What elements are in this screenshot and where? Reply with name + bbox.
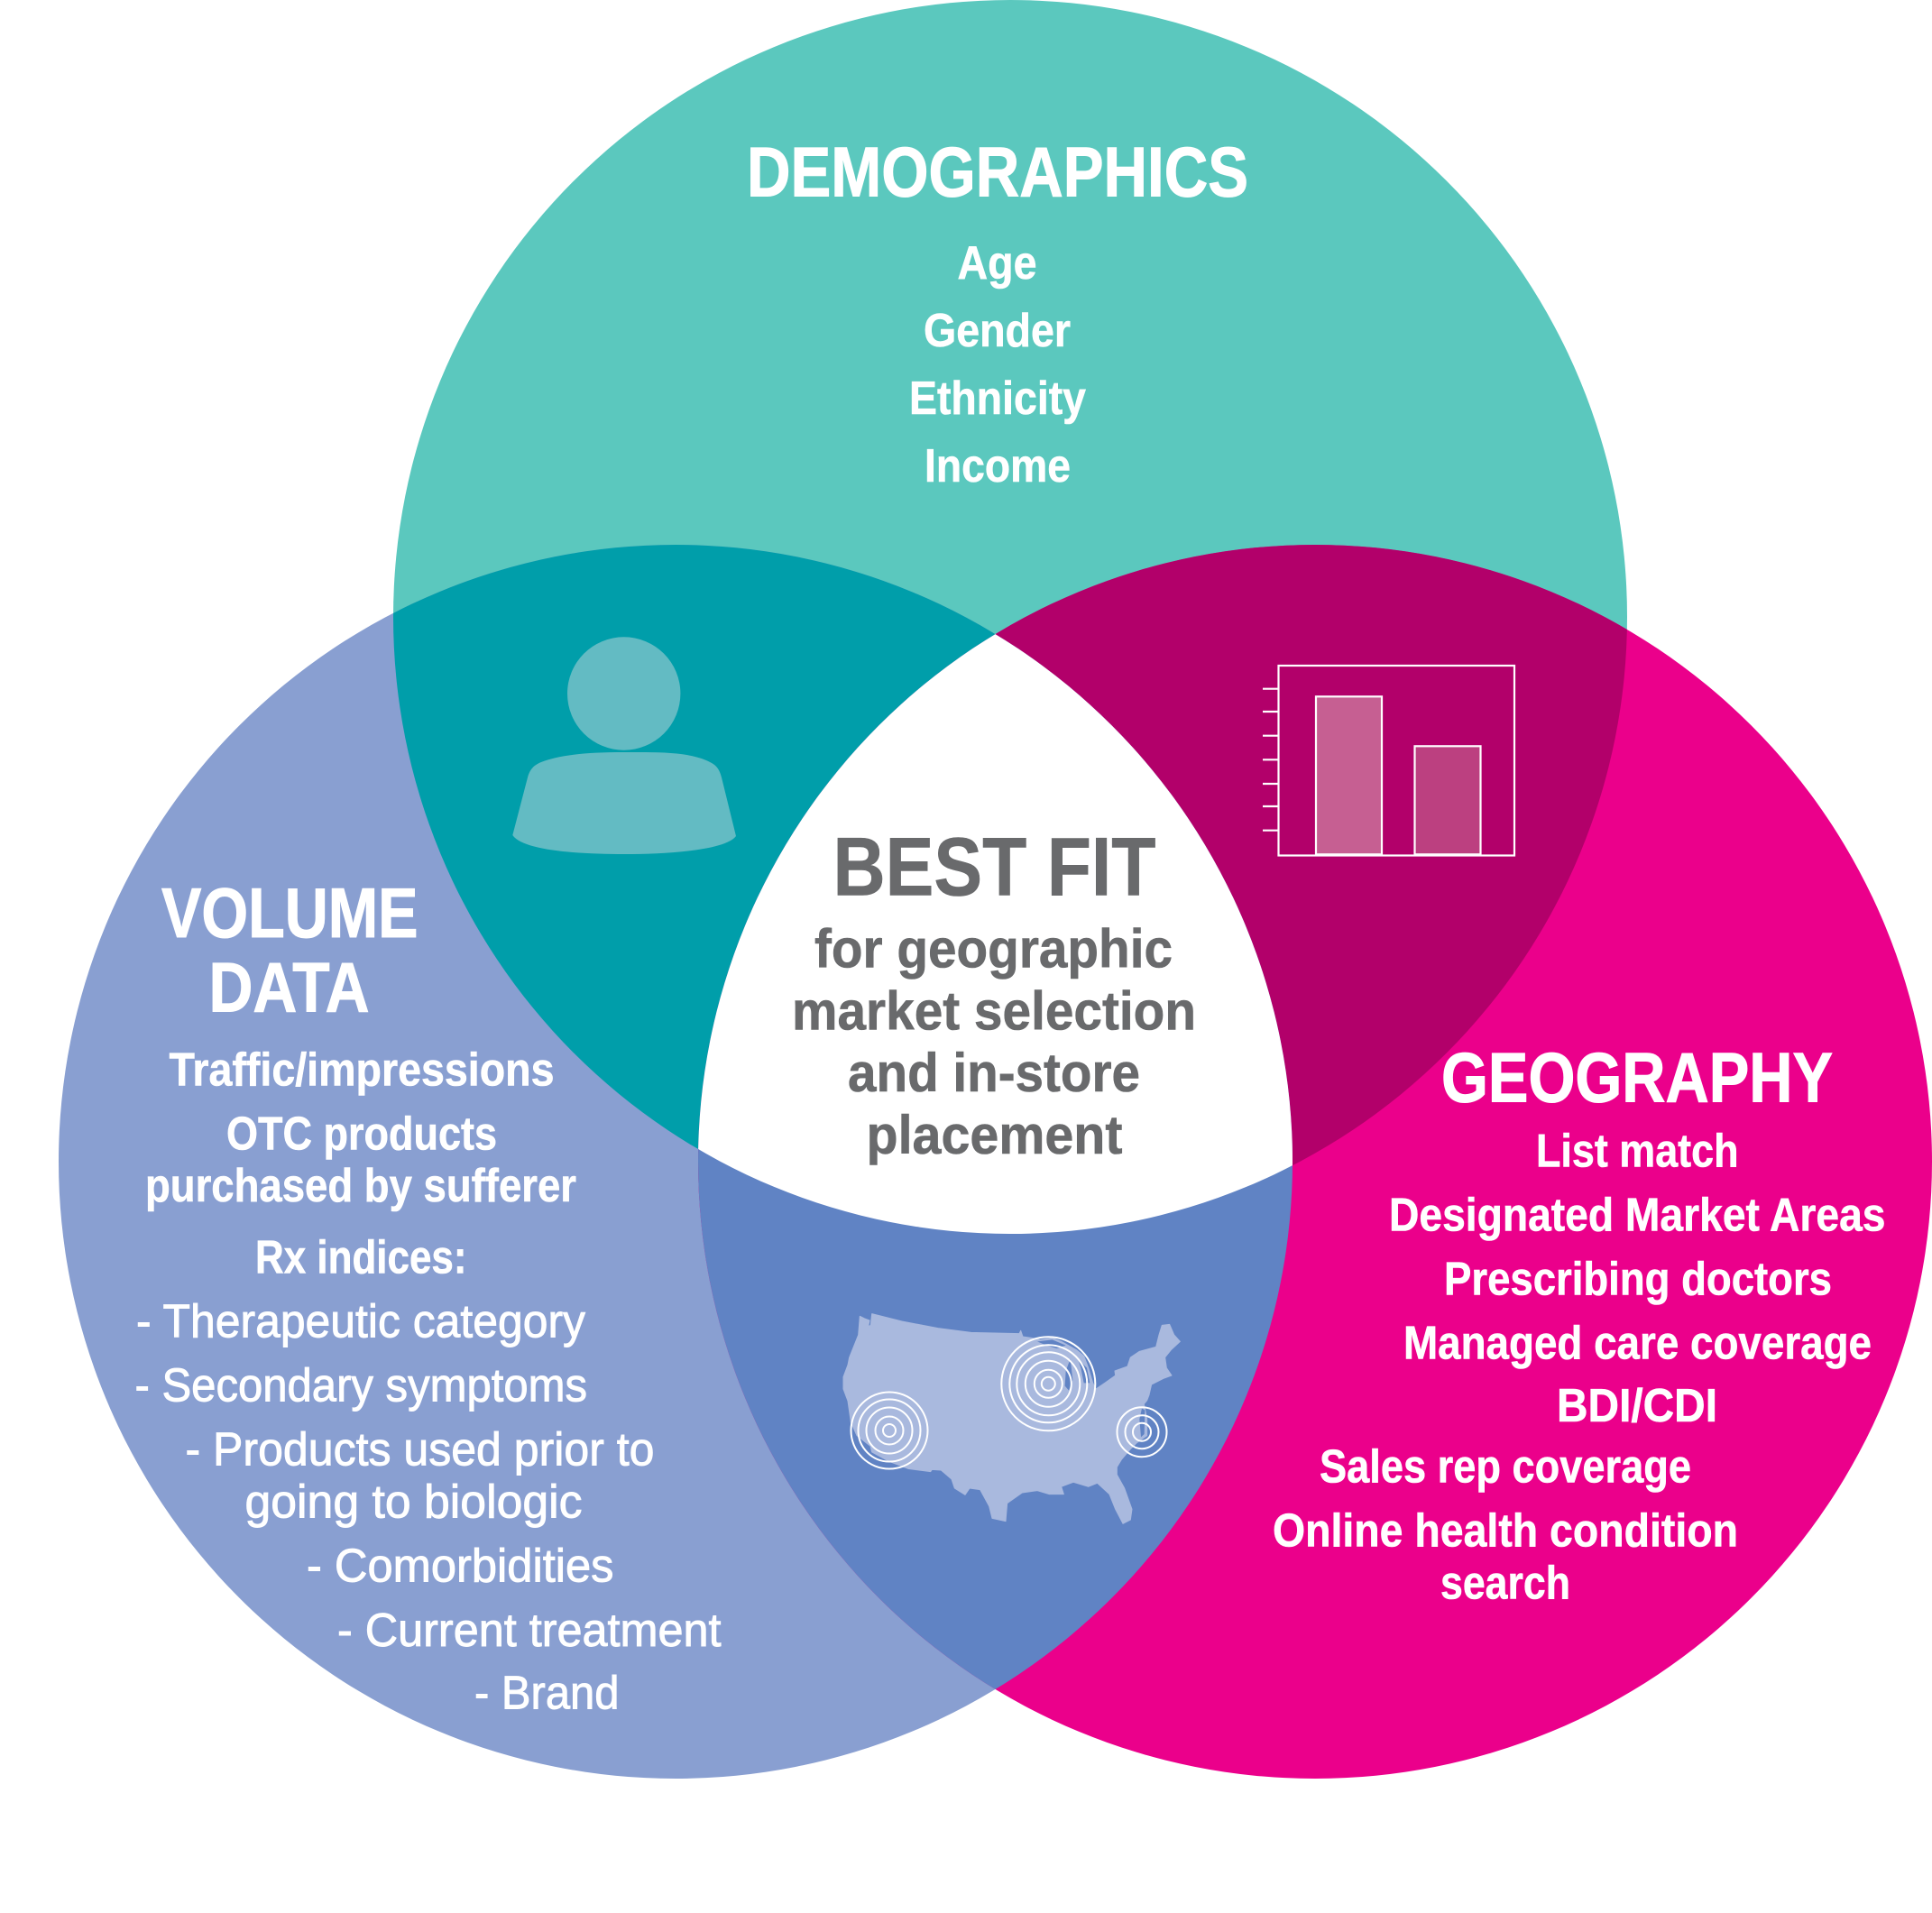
map: great lakes and bays [1037, 1339, 1145, 1437]
list: rx indices sub items: - Comorbidities [307, 1541, 613, 1593]
list: rx indices sub items [135, 1296, 722, 1719]
list: rx indices sub items: - Brand [474, 1667, 619, 1719]
list: geography items: Prescribing doctors [1444, 1254, 1832, 1306]
subheading: for geographic market selection and in-store placement: placement [866, 1105, 1123, 1165]
subheading: for geographic market selection and in-store placement: market selection [792, 981, 1196, 1042]
target rings: east [1117, 1407, 1167, 1457]
list: demographics items [909, 237, 1086, 492]
list: volume data bold items: OTC products [226, 1108, 497, 1160]
list: rx indices sub items: - Therapeutic category [136, 1296, 585, 1348]
panel: volume data text [135, 873, 722, 1719]
panel: demographics text [747, 132, 1248, 492]
heading: best fit: BEST FIT [833, 822, 1156, 914]
list: geography items: Designated Market Areas [1389, 1189, 1885, 1241]
target rings: west [851, 1393, 927, 1468]
icon: person [512, 637, 736, 854]
list: geography items [1273, 1126, 1885, 1610]
list: volume data bold items: Rx indices: [255, 1232, 467, 1284]
overlap: volume data and geography [698, 634, 1293, 1689]
overlap: demographics and geography [698, 545, 1627, 1165]
chart bar: short [1414, 746, 1481, 854]
chart bar: tall [1316, 696, 1382, 854]
circle: demographics [393, 0, 1627, 1234]
panel: best fit text [792, 822, 1196, 1165]
list: volume data bold items: purchased by sufferer [145, 1160, 576, 1212]
list: rx indices sub items: - Current treatment [337, 1605, 722, 1657]
icon: us map with target rings [843, 1314, 1180, 1523]
list: geography items: List match [1536, 1126, 1739, 1178]
overlap: demographics and volume data [393, 545, 996, 1149]
list: volume data bold items [145, 1044, 576, 1284]
subheading: for geographic market selection and in-store placement: for geographic [814, 919, 1173, 979]
list: demographics items: Income [925, 440, 1071, 492]
circle: geography [698, 545, 1932, 1779]
heading: demographics: DEMOGRAPHICS [747, 132, 1248, 211]
map: united states [843, 1314, 1180, 1523]
list: rx indices sub items: - Products used prior to [186, 1423, 655, 1476]
list: demographics items: Gender [924, 305, 1071, 357]
list: demographics items: Ethnicity [909, 372, 1086, 425]
list: geography items: Online health condition [1273, 1504, 1738, 1557]
icon: bar chart [1263, 666, 1514, 855]
heading: volume data: DATA [209, 948, 370, 1027]
chart axis ticks [1263, 689, 1278, 831]
panel: geography text [1273, 1038, 1885, 1610]
list: geography items: search [1440, 1558, 1570, 1610]
list: volume data bold items: Traffic/impressions [170, 1044, 554, 1097]
heading: geography: GEOGRAPHY [1441, 1038, 1833, 1117]
subheading: for geographic market selection and in-store placement: and in-store [848, 1043, 1140, 1103]
chart frame [1279, 666, 1514, 855]
list: geography items: BDI/CDI [1557, 1380, 1717, 1432]
list: rx indices sub items: - Secondary symptoms [135, 1360, 587, 1412]
center region: best fit [698, 634, 1293, 1234]
list: demographics items: Age [958, 237, 1037, 290]
circle: volume data [59, 545, 1293, 1779]
heading: volume data [161, 873, 419, 1027]
subheading: for geographic market selection and in-store placement [792, 919, 1196, 1165]
list: geography items: Managed care coverage [1403, 1318, 1872, 1370]
list: geography items: Sales rep coverage [1320, 1441, 1691, 1494]
target rings: midwest [1001, 1337, 1095, 1430]
list: rx indices sub items: going to biologic [245, 1476, 583, 1529]
heading: volume data: VOLUME [161, 873, 419, 952]
